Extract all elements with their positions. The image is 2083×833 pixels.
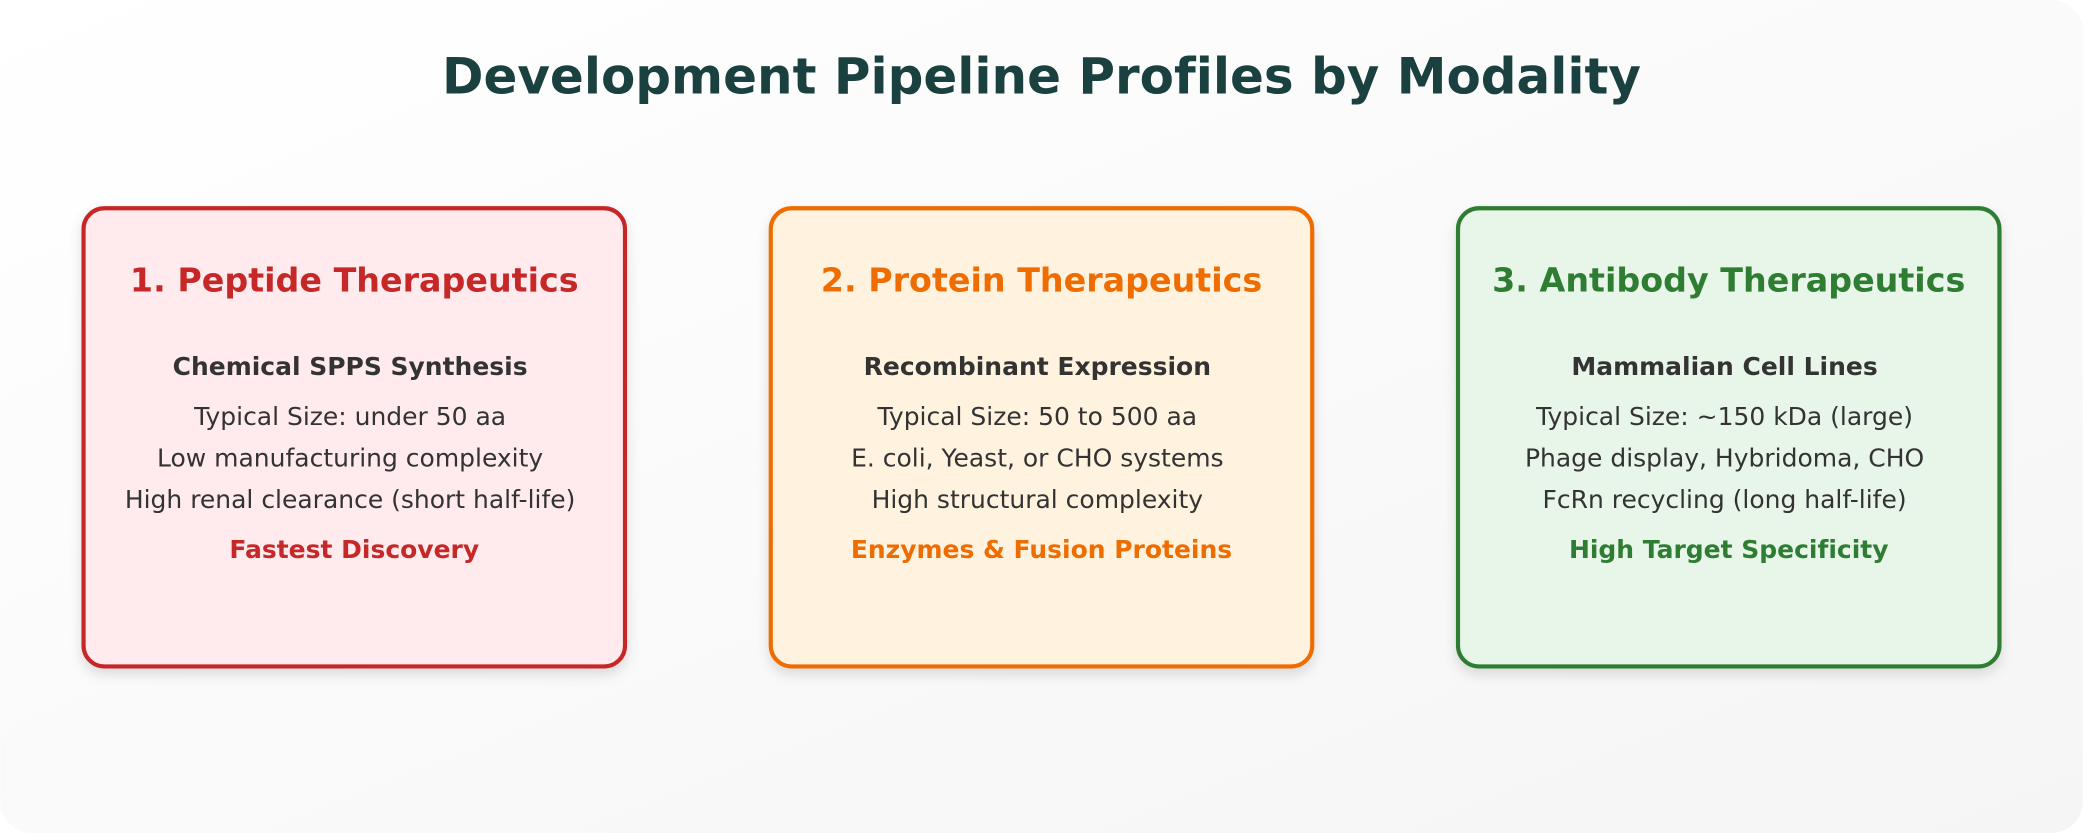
text: size: Typical Size: ~150 kDa (large): [1535, 402, 1913, 431]
text: recycling: FcRn recycling (long half-life): [1543, 485, 1907, 514]
panel: peptide therapeutics: [84, 208, 625, 666]
subheading: expression: Recombinant Expression: [864, 352, 1211, 381]
subheading: cell lines: Mammalian Cell Lines: [1571, 352, 1878, 381]
panel: protein therapeutics: [771, 208, 1312, 666]
card background: antibody: [1458, 208, 1999, 666]
panel: antibody therapeutics: [1458, 208, 1999, 666]
highlight: specificity: High Target Specificity: [1569, 535, 1889, 564]
text: complexity: Low manufacturing complexity: [157, 443, 543, 472]
heading: peptide: 1. Peptide Therapeutics: [130, 261, 579, 300]
title: Development Pipeline Profiles by Modality: [442, 48, 1641, 106]
card background: peptide: [84, 208, 625, 666]
text: size: Typical Size: under 50 aa: [193, 402, 506, 431]
text: complexity: High structural complexity: [872, 485, 1203, 514]
heading: antibody: 3. Antibody Therapeutics: [1492, 261, 1965, 300]
card background: protein: [771, 208, 1312, 666]
text: clearance: High renal clearance (short half-life): [125, 485, 575, 514]
text: systems: E. coli, Yeast, or CHO systems: [851, 443, 1224, 472]
highlight: enzymes: Enzymes & Fusion Proteins: [851, 535, 1232, 564]
subheading: synthesis: Chemical SPPS Synthesis: [173, 352, 528, 381]
heading: protein: 2. Protein Therapeutics: [821, 261, 1262, 300]
text: methods: Phage display, Hybridoma, CHO: [1525, 443, 1924, 472]
highlight: fastest discovery: Fastest Discovery: [229, 535, 479, 564]
text: size: Typical Size: 50 to 500 aa: [877, 402, 1197, 431]
